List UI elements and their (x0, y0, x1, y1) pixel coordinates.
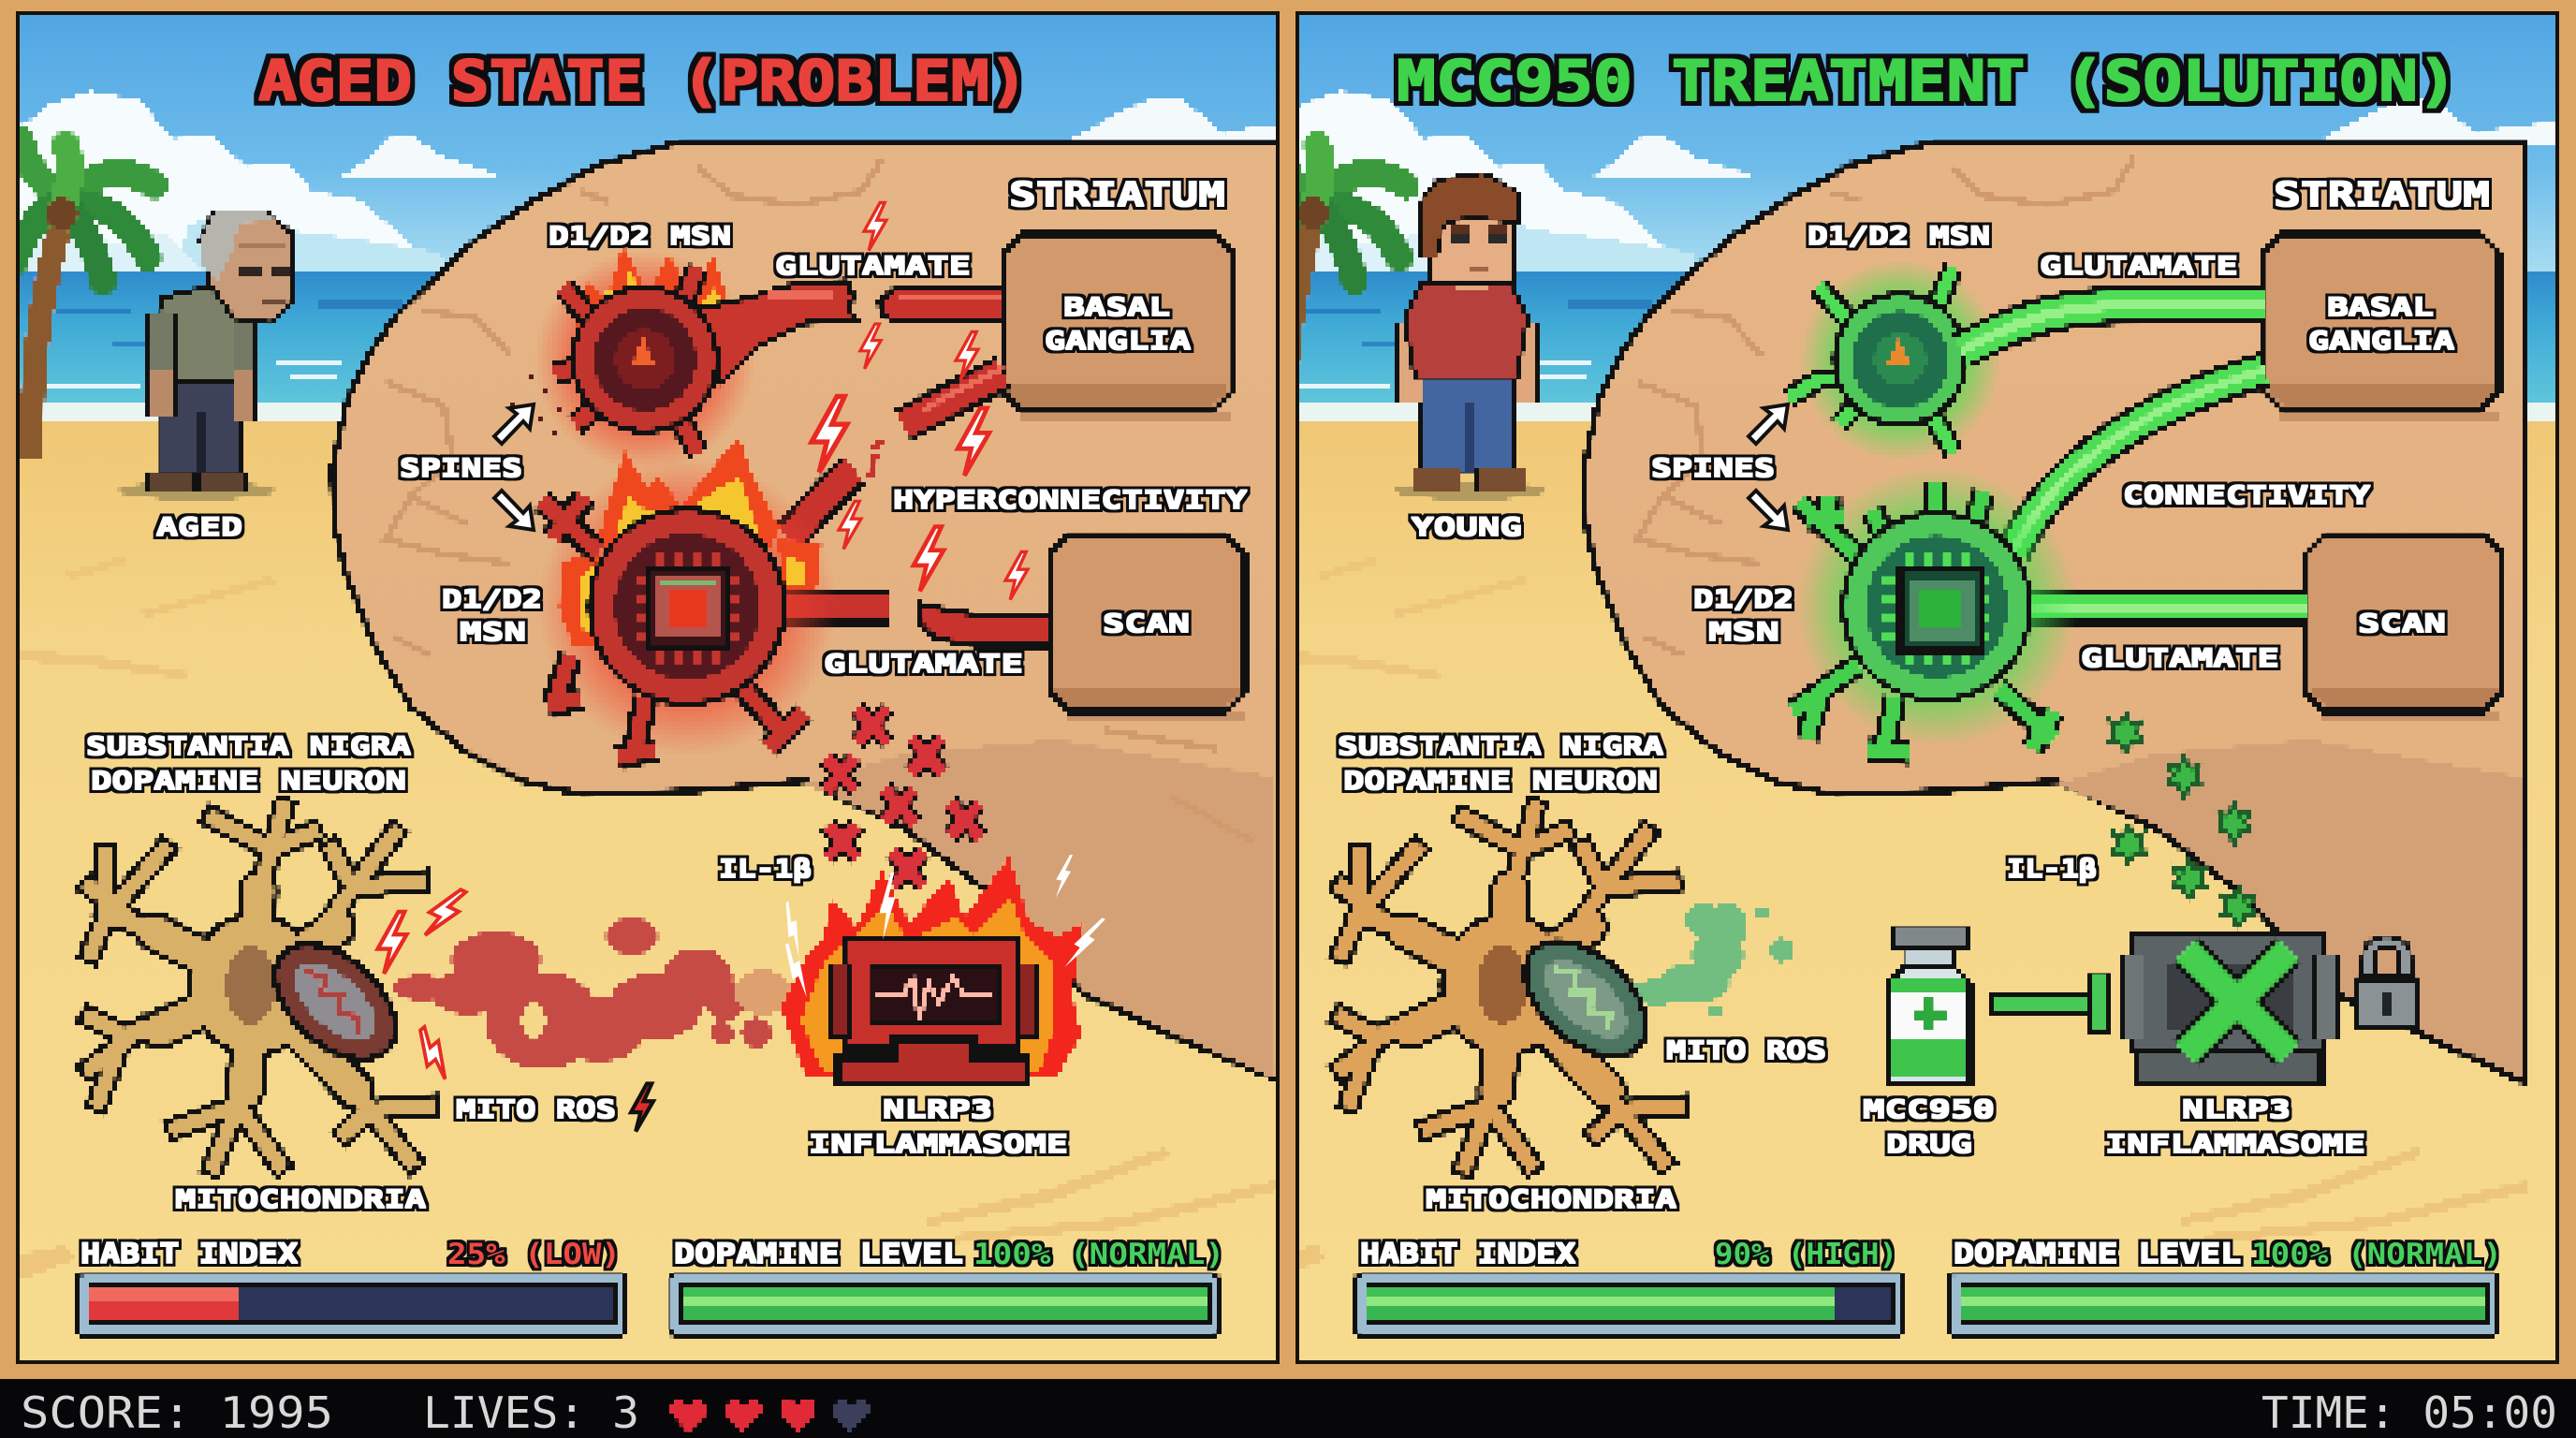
label glutamate lower: GLUTAMATE (824, 650, 1023, 679)
label nlrp3: INFLAMMASOME (809, 1130, 1068, 1159)
label striatum: STRIATUM (1009, 176, 1225, 214)
label dopamine level: DOPAMINE LEVEL (1954, 1238, 2241, 1269)
sparks (378, 202, 1028, 1082)
panel border (1297, 13, 2557, 1362)
label dopamine level: 100% (NORMAL) (973, 1238, 1224, 1271)
box: basal ganglia (1003, 234, 1232, 421)
label basal ganglia (1045, 293, 1191, 356)
hearts (670, 1399, 870, 1432)
label substantia nigra: DOPAMINE NEURON (91, 767, 406, 796)
inhibition arrow (1993, 974, 2108, 1034)
axon: connectivity (2012, 370, 2264, 552)
inflammasome sparks (776, 853, 1106, 999)
box: scan (2306, 535, 2501, 722)
spine arrow down (494, 491, 534, 530)
chip core (1883, 552, 1990, 665)
label nlrp3: NLRP3 (883, 1095, 992, 1124)
spine arrow down (1749, 491, 1788, 530)
label substantia nigra (1338, 732, 1663, 796)
right panel art (1251, 0, 2562, 1365)
ros smoke (393, 917, 791, 1069)
top neuron burning (534, 245, 856, 471)
label habit index (80, 1238, 621, 1271)
axon: broken hyperconnectivity (788, 367, 1003, 538)
nlrp3 inflammasome blocked (2123, 934, 2336, 1082)
timer: TIME: 05:00 (2261, 1387, 2557, 1438)
mitochondrion damaged (254, 922, 417, 1081)
label habit index: HABIT INDEX (1360, 1238, 1576, 1269)
label basal ganglia: BASAL (2327, 293, 2434, 322)
label il-1 beta: IL-1β (2007, 855, 2097, 884)
label nlrp3: INFLAMMASOME (2105, 1130, 2365, 1159)
label mito ros: MITO ROS (456, 1095, 616, 1124)
label mcc950 drug: DRUG (1886, 1130, 1972, 1159)
label basal ganglia: BASAL (1063, 293, 1170, 322)
chip core (637, 552, 738, 665)
mito ros bolt icon (631, 1084, 653, 1131)
score: SCORE: 1995 (21, 1387, 333, 1438)
character: young man (1394, 173, 1547, 500)
spine arrow up (1749, 404, 1788, 444)
label mcc950 drug: MCC950 (1863, 1095, 1995, 1124)
spine arrow up (494, 404, 534, 444)
label msn top: D1/D2 MSN (549, 222, 731, 251)
label substantia nigra: DOPAMINE NEURON (1343, 767, 1658, 796)
box: basal ganglia (2264, 234, 2499, 421)
label mitochondria: MITOCHONDRIA (1426, 1185, 1676, 1214)
label dopamine level: DOPAMINE LEVEL (674, 1238, 963, 1269)
axon: broken glutamate top (879, 286, 1003, 322)
panel: aged state problem (0, 0, 1310, 1365)
lower neuron healthy with chip (1793, 466, 2077, 758)
label nlrp3: NLRP3 (2182, 1095, 2291, 1124)
label young: YOUNG (1412, 513, 1522, 542)
label substantia nigra (86, 732, 411, 796)
label basal ganglia: GANGLIA (2308, 327, 2454, 356)
label striatum: STRIATUM (2274, 176, 2490, 214)
spine debris (510, 374, 563, 436)
axon: glutamate top (1961, 305, 2264, 351)
label glutamate lower: GLUTAMATE (2081, 644, 2279, 673)
il-1 beta particles reduced (2110, 713, 2255, 927)
nlrp3 inflammasome burning (781, 857, 1084, 1082)
dopamine bar (669, 1273, 1218, 1335)
label dopamine level (1954, 1238, 2502, 1271)
status bar (0, 1379, 2576, 1438)
label nlrp3 (2105, 1095, 2365, 1159)
label aged: AGED (156, 513, 242, 542)
label nlrp3 (809, 1095, 1068, 1159)
mcc950 vial (1888, 927, 1970, 1082)
label mito ros: MITO ROS (1666, 1036, 1826, 1065)
title: MCC950 TREATMENT (SOLUTION) (1397, 49, 2457, 114)
label glutamate top: GLUTAMATE (775, 252, 971, 281)
lower brain shading (805, 740, 1275, 1078)
axon: broken glutamate bottom (768, 604, 1050, 646)
label basal ganglia (2308, 293, 2454, 356)
title: AGED STATE (PROBLEM) (258, 49, 1028, 114)
label habit index (1360, 1238, 1897, 1271)
label dopamine level: 100% (NORMAL) (2251, 1238, 2502, 1271)
label connectivity: CONNECTIVITY (2123, 481, 2371, 510)
label glutamate top: GLUTAMATE (2040, 252, 2238, 281)
label msn lower: D1/D2 (442, 585, 542, 614)
lower brain shading (2056, 740, 2521, 1077)
label substantia nigra: SUBSTANTIA NIGRA (86, 732, 411, 761)
axon: glutamate lower (2031, 588, 2306, 625)
label msn lower: D1/D2 (1693, 585, 1793, 614)
label dopamine level (674, 1238, 1224, 1271)
brain folds (386, 157, 1254, 843)
brain folds (1637, 157, 2134, 655)
label substantia nigra: SUBSTANTIA NIGRA (1338, 732, 1663, 761)
label mitochondria: MITOCHONDRIA (175, 1185, 426, 1214)
ros green smoke (1631, 902, 1793, 1018)
label msn lower: MSN (1708, 618, 1779, 647)
label msn top: D1/D2 MSN (1808, 222, 1990, 251)
character: aged man (118, 212, 293, 500)
label mcc950 drug (1863, 1095, 1995, 1159)
label habit index: 90% (HIGH) (1715, 1238, 1897, 1271)
habit bar (78, 1273, 626, 1335)
label il-1 beta: IL-1β (719, 855, 812, 884)
mitochondrion healthy (1504, 919, 1667, 1078)
label hyperconnectivity: HYPERCONNECTIVITY (893, 486, 1248, 515)
label scan: SCAN (1103, 609, 1190, 638)
dopamine neuron (91, 809, 427, 1166)
label scan: SCAN (2358, 609, 2446, 638)
label msn lower (442, 585, 542, 647)
striatum brain shape (332, 141, 1287, 1084)
label spines: SPINES (400, 454, 522, 483)
label habit index: 25% (LOW) (447, 1238, 621, 1271)
dopamine neuron (1342, 809, 1678, 1166)
padlock (2355, 942, 2419, 1027)
panel border (18, 13, 1278, 1362)
top neuron healthy (1788, 259, 2001, 462)
label spines: SPINES (1651, 454, 1775, 483)
il-1 beta particles (826, 709, 980, 886)
label msn lower (1693, 585, 1793, 647)
lower neuron burning with chip (537, 437, 837, 758)
label basal ganglia: GANGLIA (1045, 327, 1191, 356)
striatum brain shape (1584, 141, 2525, 1082)
left panel art (0, 0, 1310, 1365)
habit bar (1356, 1273, 1904, 1335)
label msn lower: MSN (460, 618, 526, 647)
dopamine bar (1949, 1273, 2498, 1335)
box: scan (1050, 535, 1245, 722)
panel: mcc950 treatment solution (1251, 0, 2562, 1365)
lives: LIVES: 3 (423, 1387, 639, 1438)
label habit index: HABIT INDEX (80, 1238, 299, 1269)
